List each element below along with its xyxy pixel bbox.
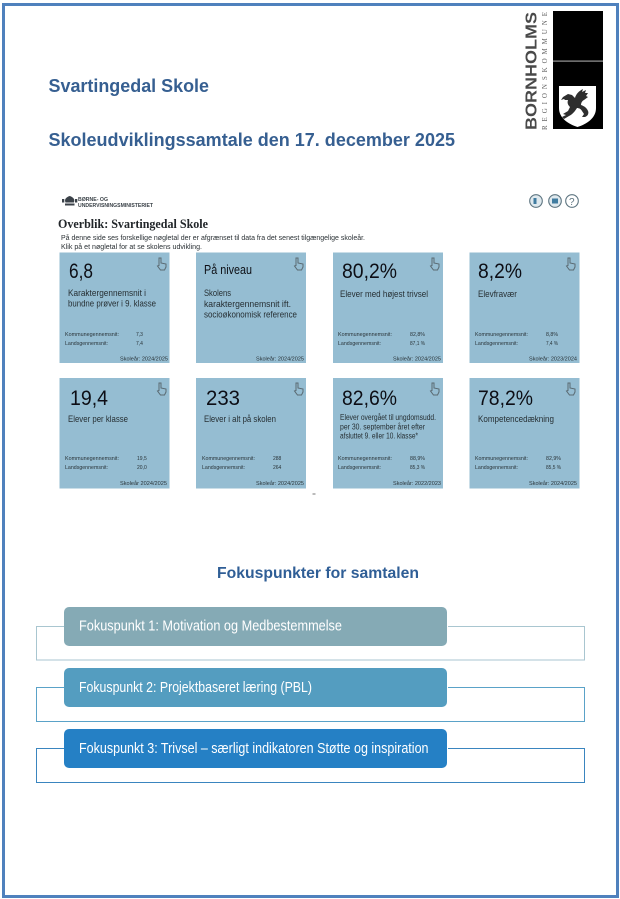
card: på niveau [196, 252, 306, 363]
card: ungdomsuddannelse: Kommunegennemsnit: [338, 456, 392, 462]
card: trivsel: 87,1 % [410, 341, 426, 347]
card: elever per klasse: Landsgennemsnit: [65, 465, 108, 471]
focus point 2: Fokuspunkt 2: Projektbaseret læring (PBL) [79, 679, 312, 696]
ministry logo: BØRNE- OG [78, 197, 108, 203]
card: elever per klasse [60, 378, 170, 488]
card: elever i alt: 288 [273, 456, 282, 462]
focus point 1 [36, 607, 584, 660]
dashboard intro text: Klik på et nøgletal for at se skolens udvikling. [61, 243, 202, 251]
card: elevfravær: Kommunegennemsnit: [475, 332, 528, 338]
card: elever i alt: Elever i alt på skolen [204, 414, 276, 425]
card: kompetencedækning: 85,5 % [546, 465, 562, 471]
card: ungdomsuddannelse: 82,6% [342, 387, 397, 410]
card: karaktergennemsnit: 6,8 [69, 260, 93, 283]
card: karaktergennemsnit: Landsgennemsnit: [65, 341, 108, 347]
card: på niveau: Skoleår: 2024/2025 [256, 356, 304, 362]
focus point 3 [36, 729, 584, 782]
card: elever per klasse: 20,0 [137, 465, 147, 471]
card: kompetencedækning [470, 378, 580, 488]
logo: Bornholms Regionskommune: BORNHOLMS [524, 12, 540, 130]
dashboard intro text [61, 234, 365, 251]
card: på niveau: socioøkonomisk reference [204, 310, 297, 320]
card: ungdomsuddannelse: afsluttet 9. eller 10. klasse* [340, 432, 418, 440]
card: karaktergennemsnit: 7,4 [136, 341, 143, 347]
dashboard heading: Overblik: Svartingedal Skole [58, 216, 208, 231]
card: elever per klasse: Elever per klasse [68, 414, 128, 425]
card: kompetencedækning: 78,2% [478, 387, 533, 410]
card: kompetencedækning: Skoleår: 2024/2025 [529, 480, 577, 487]
ministry logo [62, 196, 154, 209]
card: trivsel: Elever med højest trivsel [340, 289, 428, 300]
toolbar icons [530, 195, 578, 208]
card: trivsel: 82,8% [410, 332, 426, 338]
card: ungdomsuddannelse: per 30. september året efter [340, 422, 425, 432]
card: karaktergennemsnit: Karaktergennemsnit i [68, 288, 146, 299]
card: trivsel: 80,2% [342, 260, 397, 283]
card: ungdomsuddannelse: Landsgennemsnit: [338, 465, 381, 471]
card: kompetencedækning: Kompetencedækning [478, 414, 554, 425]
card: trivsel: Skoleår: 2024/2025 [393, 356, 441, 362]
focus point 1: Fokuspunkt 1: Motivation og Medbestemmelse [79, 618, 342, 634]
card: elever i alt [196, 378, 306, 488]
card: elevfravær: Skoleår: 2023/2024 [529, 356, 577, 362]
focus point 3: Fokuspunkt 3: Trivsel – særligt indikatoren Støtte og inspiration [79, 740, 428, 757]
card: kompetencedækning: Landsgennemsnit: [475, 465, 518, 471]
card: ungdomsuddannelse: Elever overgået til ungdomsudd. [340, 413, 436, 422]
toolbar icons: ? [569, 197, 575, 208]
title: meeting date: Skoleudviklingssamtale den 17. december 2025 [48, 130, 455, 150]
card: trivsel [333, 252, 443, 363]
card: elever per klasse: 19,4 [70, 387, 108, 410]
card: elevfravær: Landsgennemsnit: [475, 341, 518, 347]
card: trivsel: Kommunegennemsnit: [338, 332, 392, 338]
card: på niveau: karaktergennemsnit ift. [204, 299, 291, 310]
card: ungdomsuddannelse: Skoleår: 2022/2023 [393, 480, 441, 487]
card: elever per klasse: 19,5 [137, 456, 147, 462]
card: ungdomsuddannelse: 85,3 % [410, 465, 426, 471]
card: elever i alt: Skoleår: 2024/2025 [256, 480, 304, 487]
card: elever i alt: Kommunegennemsnit: [202, 456, 255, 462]
card: elever i alt: 264 [273, 465, 282, 471]
logo: Bornholms Regionskommune [524, 11, 603, 130]
card: på niveau: Skolens [204, 288, 231, 299]
dashboard screenshot [58, 195, 580, 494]
card: elevfravær [470, 252, 580, 363]
card: på niveau: På niveau [204, 262, 252, 277]
card: elever per klasse: Skoleår 2024/2025 [120, 480, 167, 487]
card: kompetencedækning: Kommunegennemsnit: [475, 456, 528, 462]
card: elevfravær: 8,2% [478, 260, 522, 283]
card: karaktergennemsnit: bundne prøver i 9. klasse [68, 298, 156, 310]
card: elevfravær: 7,4 % [546, 341, 559, 347]
card: kompetencedækning: 82,9% [546, 456, 562, 462]
card: karaktergennemsnit: 7,3 [136, 332, 143, 338]
logo: Bornholms Regionskommune: REGIONSKOMMUNE [541, 12, 549, 130]
card: karaktergennemsnit: Skoleår: 2024/2025 [120, 356, 168, 362]
card: elever i alt: 233 [206, 387, 240, 410]
dashboard intro text: På denne side ses forskellige nøgletal der er afgrænset til data fra det senest tilgængelige skoleår. [61, 234, 365, 242]
card: elever i alt: Landsgennemsnit: [202, 465, 245, 471]
heading: focus points: Fokuspunkter for samtalen [217, 565, 419, 582]
title: school name: Svartingedal Skole [48, 76, 209, 96]
card: elevfravær: 8,8% [546, 332, 559, 338]
card: ungdomsuddannelse: 88,9% [410, 456, 426, 462]
card: karaktergennemsnit: Kommunegennemsnit: [65, 332, 119, 338]
card: karaktergennemsnit [60, 252, 170, 363]
focus point 2 [36, 668, 584, 722]
ministry logo: UNDERVISNINGSMINISTERIET [78, 203, 154, 209]
card: elevfravær: Elevfravær [478, 289, 517, 300]
card: trivsel: Landsgennemsnit: [338, 341, 381, 347]
card: elever per klasse: Kommunegennemsnit: [65, 456, 119, 462]
card: ungdomsuddannelse [333, 378, 443, 488]
